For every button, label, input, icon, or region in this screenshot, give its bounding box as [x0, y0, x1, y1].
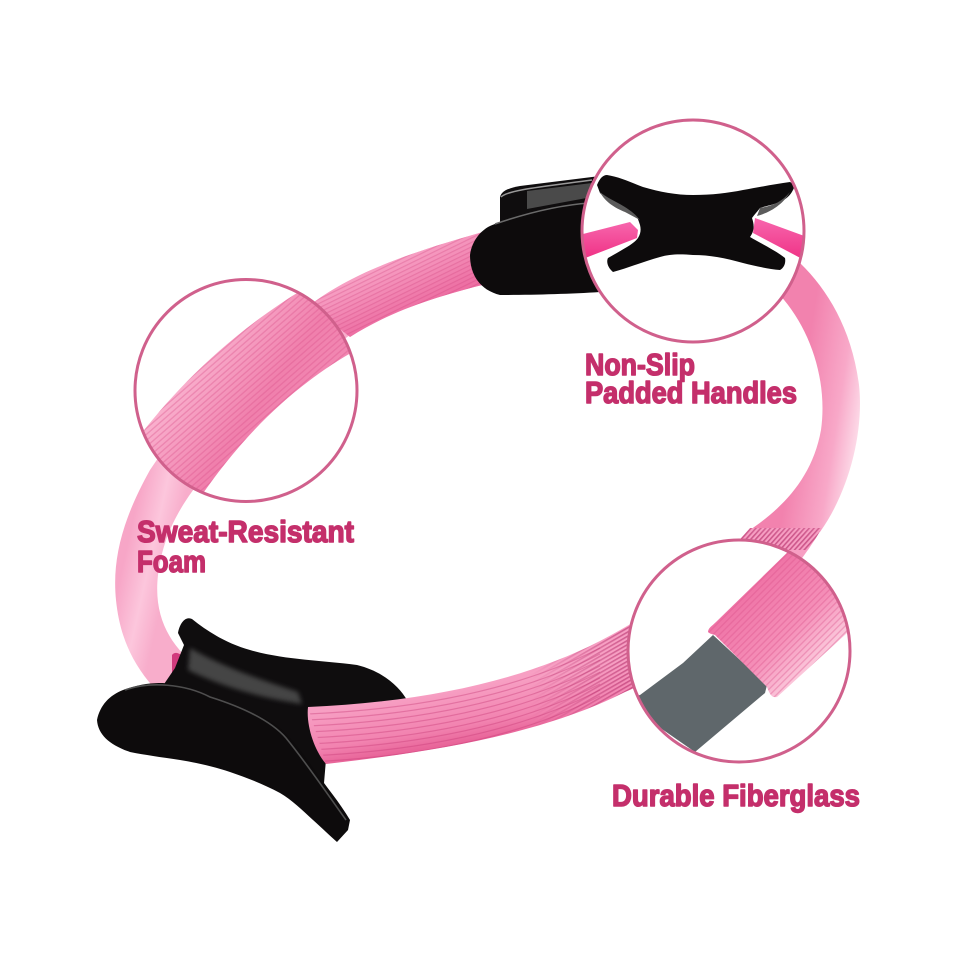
foam sleeve	[708, 552, 847, 698]
label: non-slip padded handles: Non-Slip	[585, 347, 695, 382]
foam band closeup	[144, 294, 350, 492]
plate highlight	[495, 203, 590, 224]
ring stub left	[584, 222, 638, 258]
upper handle front plate	[470, 202, 600, 295]
lower handle sheen	[188, 648, 302, 704]
ring right arc	[747, 263, 860, 532]
handle sheen right	[757, 192, 790, 216]
upper handle back plate	[500, 176, 600, 232]
pilates ring body	[115, 230, 860, 692]
label: non-slip padded handles	[585, 347, 797, 410]
label: durable fiberglass: Durable Fiberglass	[612, 778, 860, 813]
ring bottom ribs	[310, 528, 820, 762]
ring left arc	[115, 230, 490, 692]
handle sheen left	[600, 192, 640, 220]
ring stub right	[753, 218, 802, 258]
fiberglass core	[638, 635, 767, 752]
label: non-slip padded handles: Padded Handles	[585, 375, 797, 410]
label: sweat-resistant foam	[137, 514, 354, 579]
callout circle: padded handles	[575, 120, 810, 342]
callout circle: durable fiberglass	[620, 540, 870, 762]
ring bottom segment	[308, 528, 822, 764]
plate edge highlight	[125, 685, 346, 820]
handle highlight	[501, 180, 592, 197]
lower handle front plate	[97, 683, 350, 842]
callout circle: sweat-resistant foam	[120, 280, 365, 505]
lower handle connector	[160, 618, 407, 795]
ring end near lower handle	[172, 653, 186, 683]
handle closeup	[597, 175, 794, 272]
foam sleeve ribs	[708, 553, 847, 697]
ring upper ribs	[310, 230, 490, 337]
ring upper shading	[310, 230, 490, 337]
label: sweat-resistant foam: Foam	[137, 544, 206, 579]
label: sweat-resistant foam: Sweat-Resistant	[137, 514, 354, 549]
handle sheen	[527, 183, 592, 209]
